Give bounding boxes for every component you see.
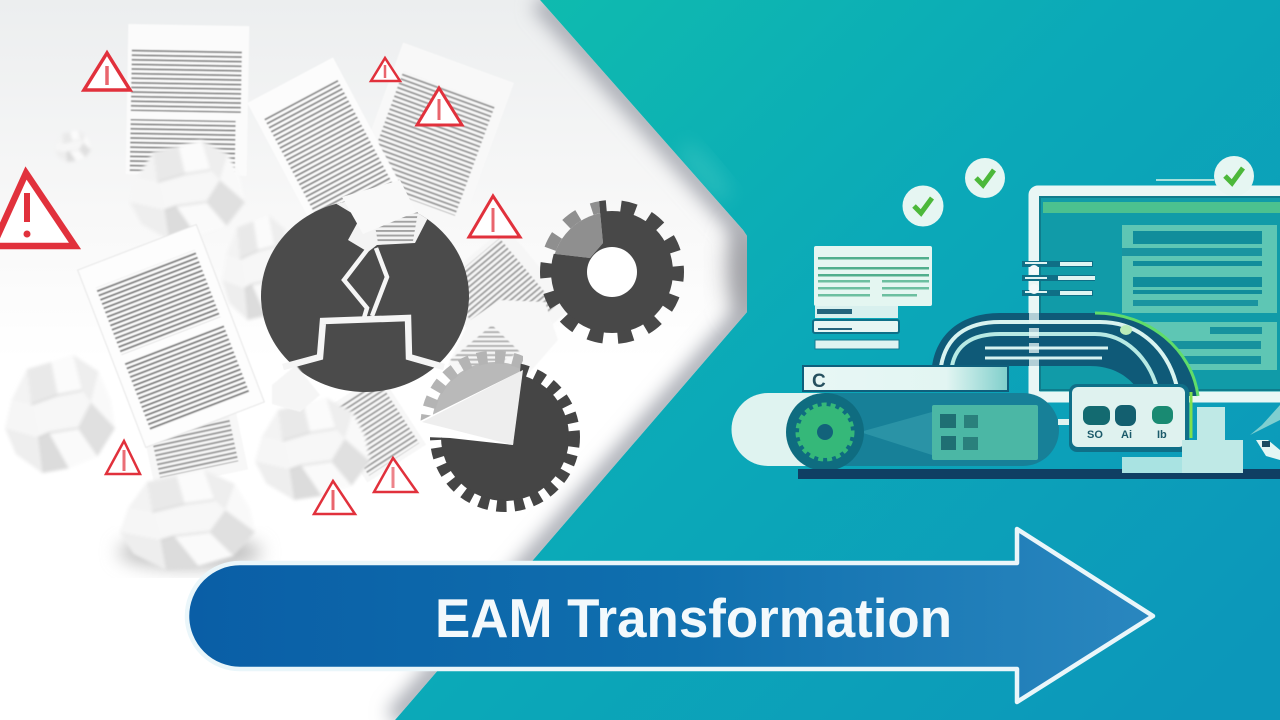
screen panel lower xyxy=(1140,322,1277,370)
light blocks xyxy=(1122,407,1243,473)
control box: SO xyxy=(1087,429,1103,441)
check badge 3 xyxy=(1156,156,1254,196)
pipe node xyxy=(1120,325,1132,335)
arch dark band xyxy=(932,313,1198,396)
crumple: small xyxy=(55,130,91,162)
form rows xyxy=(813,306,899,349)
crumples xyxy=(130,140,297,320)
notch paper corner xyxy=(342,180,416,234)
monitor xyxy=(1022,191,1280,397)
side status rows xyxy=(1022,261,1095,296)
base rail xyxy=(798,469,1280,479)
crumple: upper left xyxy=(130,140,245,240)
gear: lower right xyxy=(422,357,574,506)
green control panel xyxy=(932,405,1038,460)
small vehicle xyxy=(1250,405,1280,460)
arch green rim xyxy=(1095,313,1198,396)
check badge 1 xyxy=(902,186,944,226)
pipe outer xyxy=(941,322,1178,392)
monitor title bar xyxy=(1043,202,1280,213)
input bar xyxy=(803,366,1008,392)
warning: large xyxy=(0,173,75,246)
folded paper wedge xyxy=(422,370,523,445)
document right xyxy=(350,43,514,229)
crumples lower xyxy=(5,130,370,570)
crack line xyxy=(344,250,367,318)
control box xyxy=(1069,384,1189,452)
warning: lower middle xyxy=(374,458,417,492)
check badges xyxy=(902,158,1005,226)
crumple: behind circle xyxy=(222,215,297,320)
warning: bottom xyxy=(314,481,355,514)
document center xyxy=(247,57,415,257)
broken circle icon xyxy=(261,180,469,392)
soft shadow: bottom xyxy=(118,536,262,568)
input bar: C xyxy=(812,371,826,392)
notch paper lines xyxy=(375,212,418,243)
small document xyxy=(814,246,932,306)
top-hat crack xyxy=(283,318,444,367)
conveyor xyxy=(732,393,1059,471)
warning: top middle xyxy=(371,58,400,81)
screen panel upper xyxy=(1122,225,1277,313)
document bottom xyxy=(143,411,248,489)
arrow banner xyxy=(187,529,1153,702)
gear dark portion xyxy=(436,368,574,506)
crumple: bottom middle xyxy=(255,398,370,500)
paper pile around circle xyxy=(272,300,558,412)
gear faded portion xyxy=(544,201,603,258)
green gear wheel xyxy=(786,393,864,471)
pipe straight lines xyxy=(985,348,1108,358)
gear light portion xyxy=(420,351,523,420)
gear dark portion xyxy=(546,206,678,338)
check badge 2 xyxy=(965,158,1005,198)
pipes arch xyxy=(932,313,1198,396)
teal light streak xyxy=(673,137,737,207)
gear: upper right xyxy=(546,206,678,338)
crack branch xyxy=(372,248,387,316)
green glow edge xyxy=(1190,392,1192,438)
warning: right xyxy=(469,196,520,237)
document lower center xyxy=(321,373,426,483)
panel: digital system illustration xyxy=(732,156,1280,479)
document large xyxy=(78,225,264,447)
control box: Ib xyxy=(1157,429,1167,441)
monitor inner edge xyxy=(1040,197,1280,390)
warning: top left xyxy=(84,53,130,90)
connector xyxy=(1058,419,1074,425)
document top xyxy=(126,24,249,176)
monitor frame crossing xyxy=(1029,313,1039,366)
document stack xyxy=(126,24,573,489)
chevron edge shading xyxy=(395,0,774,720)
warning icons xyxy=(0,53,520,514)
crumple: lower left xyxy=(5,355,115,473)
warning: on document xyxy=(417,88,462,125)
pipe inner xyxy=(952,334,1158,392)
warning: lower left xyxy=(106,441,140,474)
banner title: EAM Transformation xyxy=(435,587,952,649)
crumple: bottom left xyxy=(120,470,255,570)
cone highlight xyxy=(860,412,932,455)
panel: chaos side with white chevron xyxy=(0,0,774,720)
crack notch xyxy=(336,202,428,252)
document behind circle right xyxy=(433,227,573,368)
control box: Ai xyxy=(1121,429,1132,441)
